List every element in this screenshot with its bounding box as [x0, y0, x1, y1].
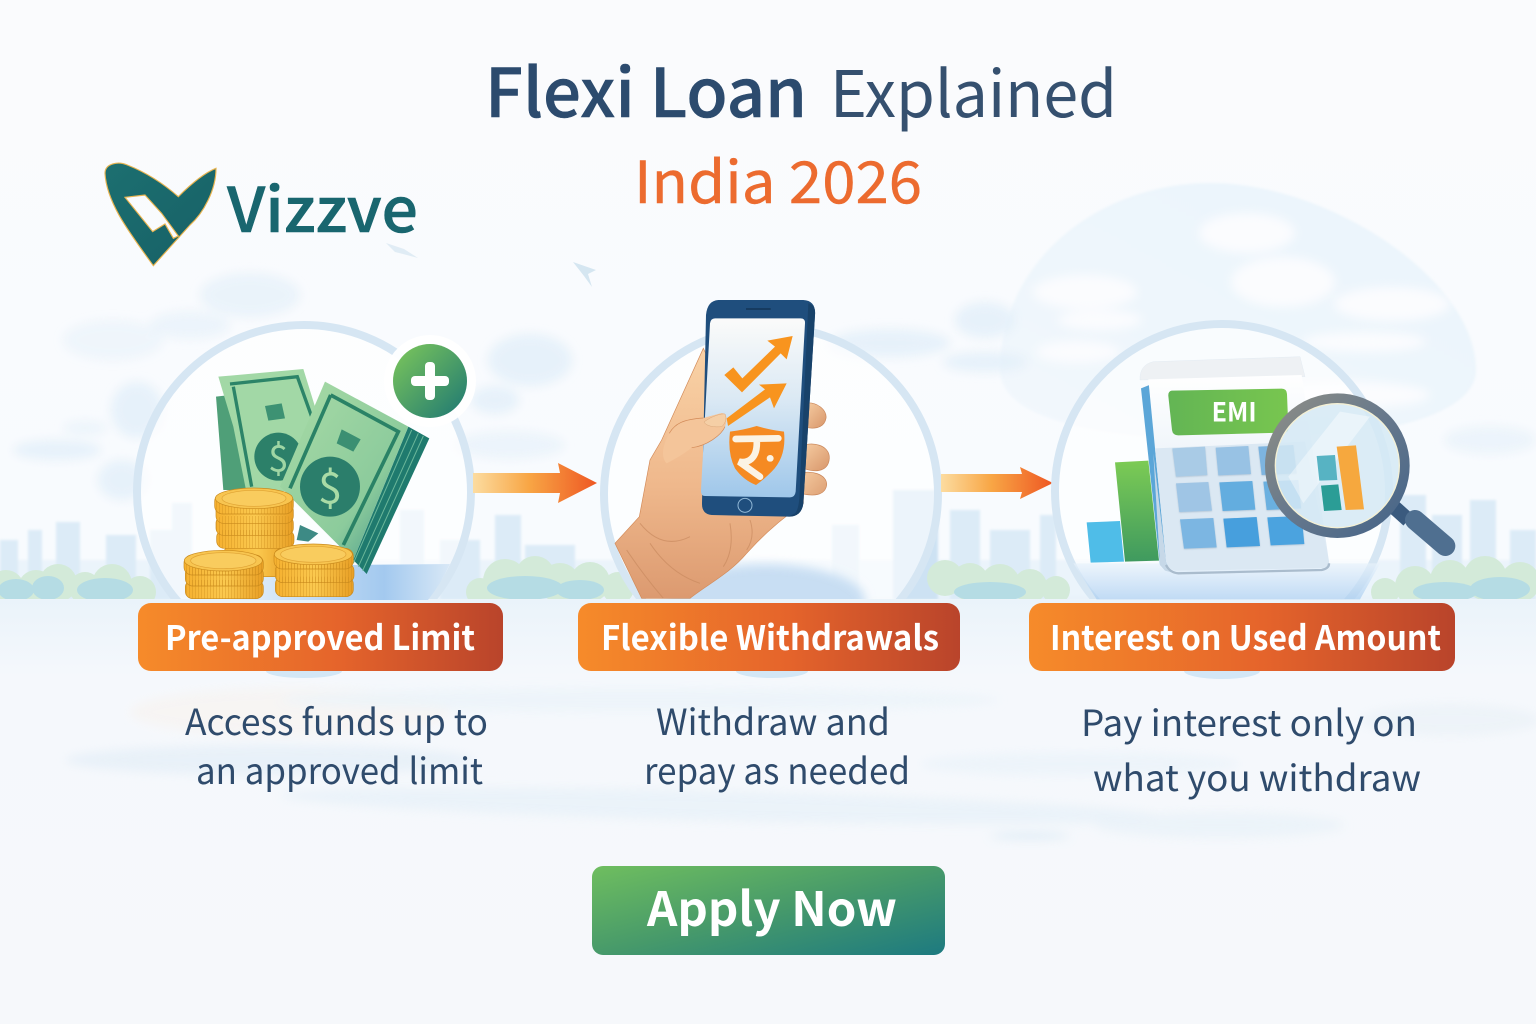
ground 3: [1073, 563, 1380, 599]
icon: money and coins: [184, 369, 429, 599]
circle 1: [133, 321, 475, 599]
label pill: Flexible Withdrawals: [578, 603, 960, 671]
birds: [386, 243, 596, 287]
EMI display: [1168, 389, 1288, 435]
subtitle: India 2026: India 2026: [634, 136, 922, 220]
palm: [615, 348, 790, 598]
text block: withdrawal description: repay as needed: [644, 743, 910, 795]
globe dome with clouds: [1000, 183, 1476, 440]
text block: limit description: Access funds up to: [185, 694, 488, 746]
wordmark: Vizzve: [226, 160, 418, 250]
title: Explained: [830, 44, 1117, 136]
ground 2: [662, 559, 869, 599]
front bill: [280, 382, 408, 560]
text block: withdrawal description: [644, 694, 910, 795]
coin stack: left: [185, 580, 263, 599]
icon: money and coins: $: [318, 454, 342, 516]
coin stack: right: [275, 577, 353, 597]
circle 2: [600, 328, 942, 599]
coin stacks: [184, 488, 354, 599]
icon: EMI calculator with magnifier: [1073, 357, 1445, 599]
title: Flexi Loan: [485, 40, 807, 137]
panel: flexible withdrawals illustration: [600, 300, 942, 599]
icon: rupee shield: [729, 426, 784, 485]
label pill: Pre-approved Limit: Pre-approved Limit: [165, 611, 475, 660]
skyline: [0, 490, 1536, 600]
text block: limit description: [185, 694, 488, 795]
calculator lid: [1140, 357, 1305, 380]
circle bottoms below pills: [266, 663, 1260, 679]
chart bars: [1087, 521, 1124, 563]
trees: [0, 556, 1536, 599]
arrow: limit to withdrawals: [473, 463, 597, 503]
fingers: [795, 403, 829, 507]
label pill: Pre-approved Limit: [138, 603, 503, 671]
text block: interest description: [1081, 695, 1421, 802]
title: [485, 40, 1117, 137]
sky clouds: [13, 273, 1536, 500]
panel: interest on used amount illustration: [1051, 320, 1456, 600]
bill stack edge: [353, 427, 429, 574]
circle 3: [1051, 320, 1392, 599]
magnifier handle: [1392, 505, 1408, 520]
label pill: Flexible Withdrawals: Flexible Withdrawals: [601, 611, 939, 660]
icon: growth arrow: [727, 383, 787, 426]
keypad: [1172, 445, 1304, 549]
logo: Vizzve: [105, 160, 418, 266]
icon: plus badge: [384, 335, 476, 427]
back bill: [216, 395, 250, 490]
arrow: withdrawals to interest: [941, 467, 1053, 499]
magnified chart: [1317, 455, 1337, 481]
text block: interest description: Pay interest only on: [1081, 695, 1417, 747]
icon: money and coins: $: [268, 429, 289, 483]
panel: pre-approved limit illustration: [133, 321, 476, 600]
lower background washes: [65, 688, 1536, 839]
icon: hand holding phone: [615, 300, 829, 598]
calculator body: [1148, 375, 1329, 571]
icon: EMI calculator with magnifier: EMI: [1212, 392, 1257, 429]
icon: heart V mark: [105, 163, 216, 266]
calculator side: [1141, 385, 1168, 568]
label pill: Interest on Used Amount: [1029, 603, 1455, 671]
button: Apply Now: [592, 866, 945, 955]
ground 1: [230, 564, 450, 600]
coin stack: lower centre: [223, 547, 290, 577]
label pill: Interest on Used Amount: Interest on Used Amount: [1050, 611, 1441, 660]
icon: check arrow: [724, 336, 793, 392]
button: Apply Now: Apply Now: [646, 871, 897, 940]
thumb: [663, 413, 726, 463]
text block: interest description: what you withdraw: [1093, 750, 1421, 802]
phone screen: [701, 318, 805, 497]
text block: limit description: an approved limit: [196, 743, 483, 795]
phone body: [702, 300, 815, 517]
coin stack: centre: [217, 530, 294, 548]
magnifier lens: [1274, 402, 1401, 529]
text block: withdrawal description: Withdraw and: [656, 694, 890, 746]
